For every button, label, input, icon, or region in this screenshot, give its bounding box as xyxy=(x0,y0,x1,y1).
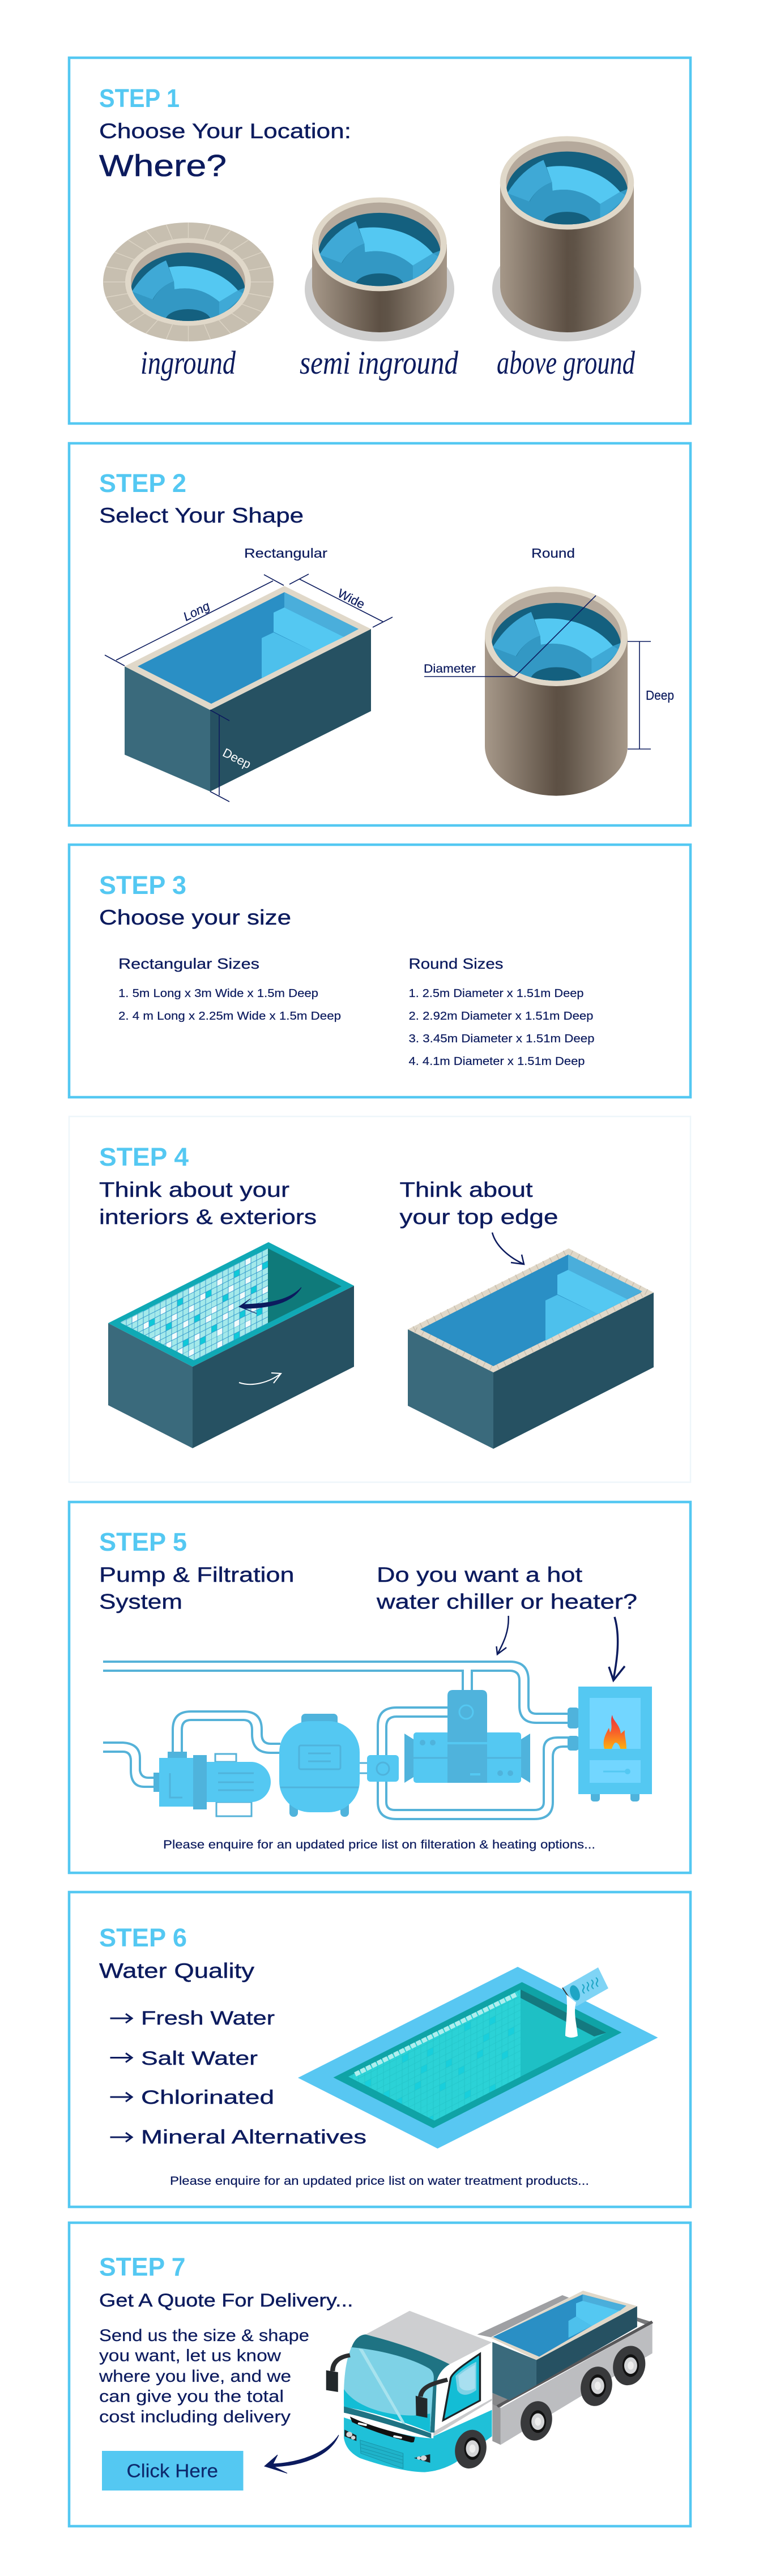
list: water types: Chlorinated xyxy=(141,2087,274,2108)
heading: choose your size: Choose your size xyxy=(99,906,291,929)
arrow: to heater xyxy=(609,1617,625,1680)
illustration: round pool with dimensions xyxy=(424,587,674,796)
body text xyxy=(99,2326,309,2427)
list: round sizes: 2. 2.92m Diameter x 1.51m Deep xyxy=(409,1009,594,1022)
label: round: Round xyxy=(531,546,575,560)
label: semi inground: semi inground xyxy=(300,344,459,381)
heading: choose your location: Choose Your Location: xyxy=(99,119,351,143)
arrow: truck to button xyxy=(265,2435,339,2473)
heading: top edge: Think about xyxy=(400,1178,533,1201)
illustration: above ground pool xyxy=(492,136,641,341)
step 1 label: STEP 1 xyxy=(99,84,180,113)
arrow: to chiller xyxy=(496,1616,509,1654)
heading: pump and filtration: Pump & Filtration xyxy=(99,1563,295,1586)
illustration: round pool with dimensions: Diameter xyxy=(424,662,476,675)
heading: top edge xyxy=(400,1178,558,1229)
heading: chiller or heater: water chiller or heater? xyxy=(376,1590,637,1614)
label: inground: inground xyxy=(140,344,236,381)
heading: chiller or heater xyxy=(376,1563,637,1614)
button: click here: Click Here xyxy=(127,2461,218,2481)
panel: step 5 pump and filtration xyxy=(69,1502,690,1873)
list: rectangular sizes: 2. 4 m Long x 2.25m Wide x 1.5m Deep xyxy=(118,1009,341,1022)
list: rectangular sizes xyxy=(118,955,341,1022)
panel: step 6 water quality xyxy=(69,1892,690,2207)
list: water types: Mineral Alternatives xyxy=(141,2126,366,2148)
step 6 label: STEP 6 xyxy=(99,1923,187,1952)
body text: you want, let us know xyxy=(99,2346,281,2365)
icon: filter tank xyxy=(279,1714,360,1817)
label: rectangular: Rectangular xyxy=(244,546,327,560)
caption: water treatment price list: Please enquire for an updated price list on water treatment products... xyxy=(170,2175,589,2188)
illustration: semi inground pool xyxy=(305,198,454,341)
illustration: rectangular pool with dimensions xyxy=(105,574,393,802)
heading: pump and filtration xyxy=(99,1563,295,1614)
heading: interiors and exteriors: interiors & exteriors xyxy=(99,1205,317,1229)
pipework xyxy=(103,1662,569,1819)
heading: pump and filtration: System xyxy=(99,1590,182,1614)
body text: Send us the size & shape xyxy=(99,2326,309,2345)
step 5 label: STEP 5 xyxy=(99,1527,187,1556)
heading: where: Where? xyxy=(99,149,227,183)
illustration: tiled pool with arrows xyxy=(108,1242,354,1448)
illustration: inground pool xyxy=(103,222,274,341)
heading: top edge: your top edge xyxy=(400,1205,558,1229)
label: above ground: above ground xyxy=(497,344,636,381)
icon: valve box xyxy=(367,1755,399,1782)
illustration: rectangular pool with dimensions: Deep xyxy=(220,745,253,772)
list: water types: Salt Water xyxy=(141,2048,258,2069)
list: water types xyxy=(110,2008,366,2148)
illustration: rectangular pool with dimensions: Wide xyxy=(335,586,367,611)
list: round sizes: 1. 2.5m Diameter x 1.51m Deep xyxy=(409,987,583,1000)
body text: cost including delivery xyxy=(99,2407,291,2427)
panel: step 2 shape xyxy=(69,443,690,825)
panel: step 3 size xyxy=(69,845,690,1097)
illustration: pool with tiled top edge xyxy=(408,1233,654,1449)
list: rectangular sizes: Rectangular Sizes xyxy=(118,955,259,972)
step 2 label: STEP 2 xyxy=(99,469,186,498)
panel: step 1 location xyxy=(69,58,690,423)
icon: heater with flame xyxy=(568,1687,652,1802)
heading: interiors and exteriors: Think about your xyxy=(99,1178,289,1201)
step 4 label: STEP 4 xyxy=(99,1142,189,1171)
panel: step 7 delivery quote xyxy=(69,2223,690,2526)
step 3 label: STEP 3 xyxy=(99,871,186,900)
caption: filtration price list: Please enquire for an updated price list on filteration & heating options... xyxy=(163,1838,595,1851)
list: round sizes: 4. 4.1m Diameter x 1.51m Deep xyxy=(409,1055,585,1068)
list: round sizes xyxy=(409,955,595,1068)
heading: interiors and exteriors xyxy=(99,1178,317,1229)
heading: select your shape: Select Your Shape xyxy=(99,504,304,527)
panel: step 4 interiors and edges xyxy=(69,1116,690,1482)
list: round sizes: 3. 3.45m Diameter x 1.51m Deep xyxy=(409,1032,595,1045)
heading: water quality: Water Quality xyxy=(99,1959,255,1983)
list: rectangular sizes: 1. 5m Long x 3m Wide x 1.5m Deep xyxy=(118,987,318,1000)
list: water types: Fresh Water xyxy=(141,2008,275,2029)
illustration: round pool with dimensions: Deep xyxy=(646,688,674,703)
illustration: delivery truck with pool xyxy=(326,2291,653,2472)
heading: get a quote: Get A Quote For Delivery... xyxy=(99,2290,353,2310)
heading: chiller or heater: Do you want a hot xyxy=(377,1563,583,1586)
body text: can give you the total xyxy=(99,2387,284,2406)
illustration: pool with treatment bottle xyxy=(298,1967,658,2149)
body text: where you live, and we xyxy=(99,2367,291,2386)
illustration: rectangular pool with dimensions: Long xyxy=(181,598,212,624)
icon: chiller unit xyxy=(404,1690,530,1783)
step 7 label: STEP 7 xyxy=(99,2252,186,2282)
button: click here xyxy=(102,2451,244,2491)
list: round sizes: Round Sizes xyxy=(409,955,503,972)
icon: pump xyxy=(153,1752,271,1816)
